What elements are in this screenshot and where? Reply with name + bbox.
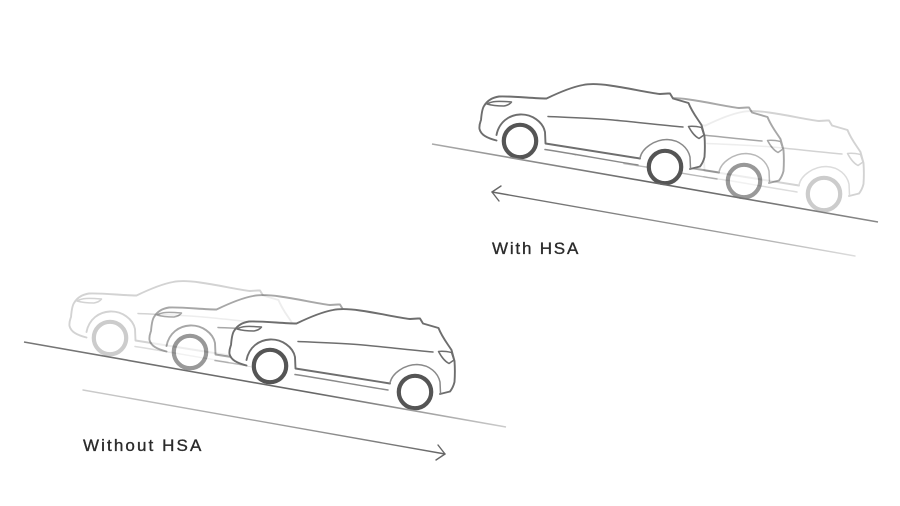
panel: with HSA scene — [432, 84, 878, 258]
arrow: rolling direction with HSA — [492, 186, 855, 256]
ground slope: without HSA — [24, 342, 506, 427]
text: Without HSA: Without HSA — [83, 436, 203, 455]
ground slope: with HSA — [432, 144, 878, 222]
car: farthest ghost position — [638, 111, 864, 210]
panel: without HSA scene — [24, 281, 506, 460]
car: main position — [229, 309, 455, 408]
text: With HSA: With HSA — [492, 239, 580, 258]
car: farthest ghost position — [69, 281, 295, 366]
car: main position — [479, 84, 705, 183]
arrow: rolling direction without HSA — [83, 390, 445, 460]
car: middle ghost position — [558, 98, 784, 197]
car: middle ghost position — [149, 295, 375, 380]
